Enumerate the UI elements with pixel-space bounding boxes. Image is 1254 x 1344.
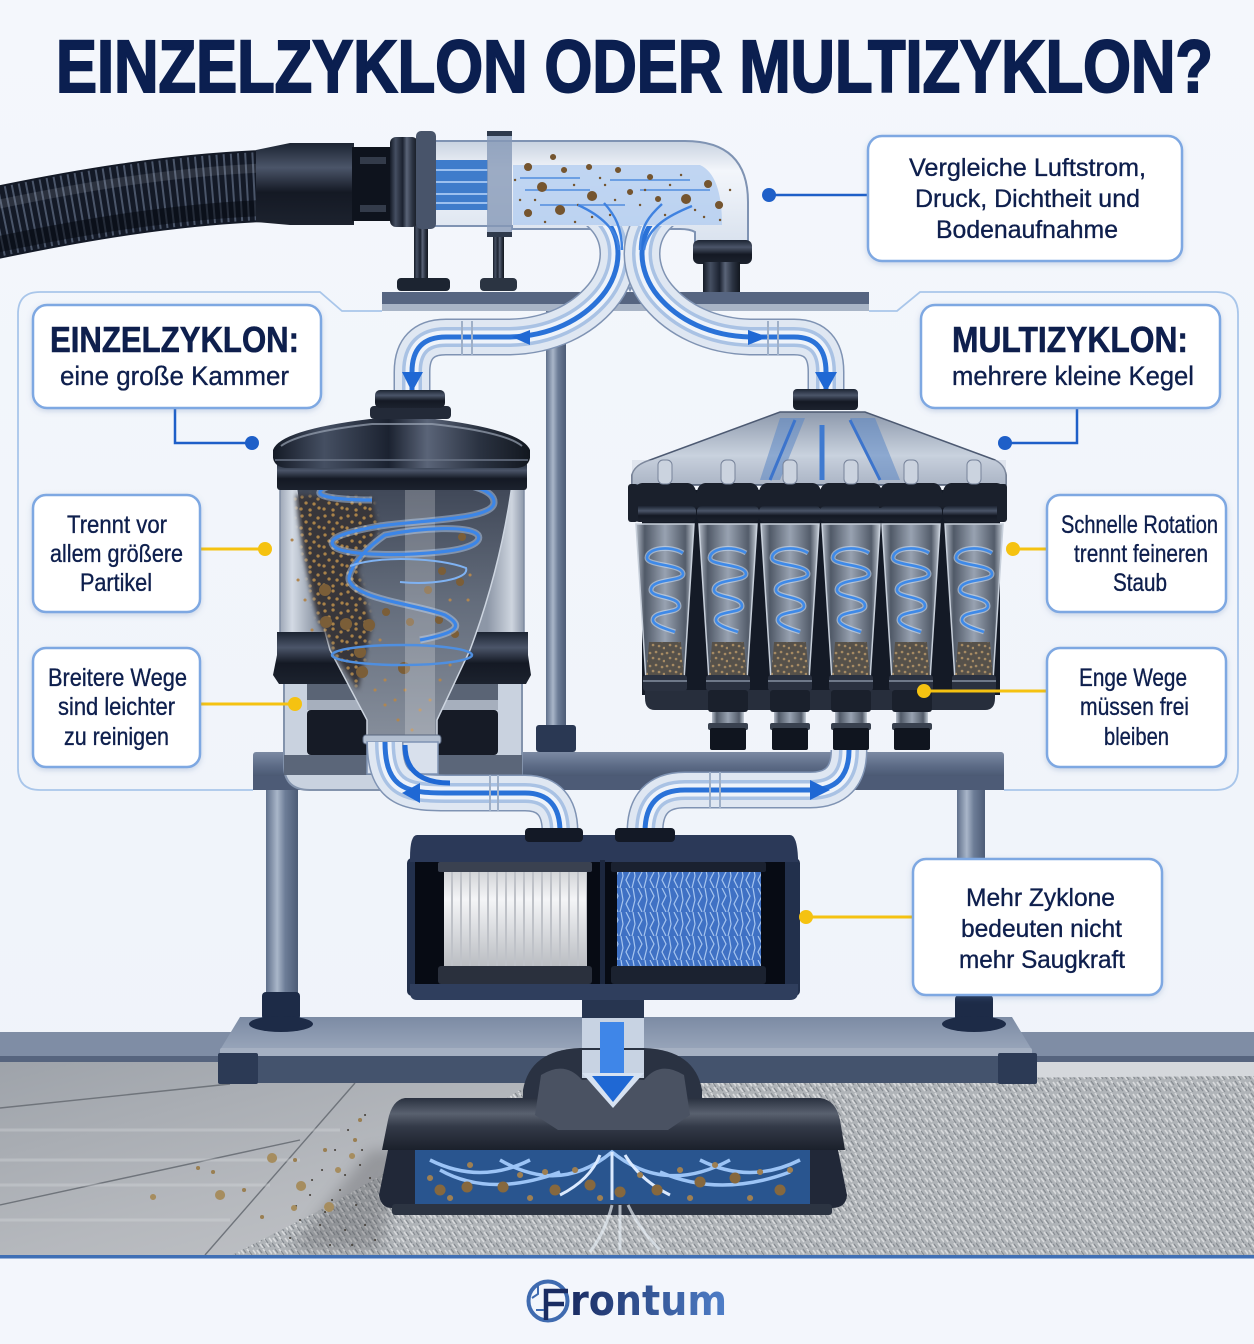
clear dome xyxy=(632,412,1006,485)
nozzle hub xyxy=(535,1069,690,1130)
callout: larger particles: allem größere xyxy=(50,540,183,568)
callout: narrow paths: müssen frei xyxy=(1080,693,1189,721)
callout: more cyclones: bedeuten nicht xyxy=(961,915,1122,943)
white pleated filter xyxy=(438,862,592,984)
panel outline: right xyxy=(869,292,1238,790)
airflow wisps xyxy=(590,1205,660,1252)
floor: carpet xyxy=(230,1076,1254,1256)
dark collar xyxy=(277,462,527,490)
swirl xyxy=(320,480,494,665)
filter inlets xyxy=(525,828,675,842)
dark backing xyxy=(642,490,1000,695)
callout: more cyclones: Mehr Zyklone xyxy=(966,884,1115,912)
heading box: Einzelzyklon: EINZELZYKLON: xyxy=(50,319,299,360)
base platform xyxy=(218,1017,1037,1084)
callout: larger particles: Partikel xyxy=(80,569,152,597)
callout: larger particles xyxy=(33,495,272,612)
left transfer pipe xyxy=(402,212,618,392)
dust inside cone xyxy=(285,485,470,730)
footer xyxy=(0,1255,1254,1344)
right transfer pipe xyxy=(642,212,837,392)
callout: fast rotation xyxy=(1006,495,1226,612)
callout: more cyclones xyxy=(799,859,1162,995)
heading box: Multizyklon: MULTIZYKLON: xyxy=(952,319,1188,360)
lower right pipe xyxy=(645,750,849,832)
flow arrow xyxy=(582,1045,644,1108)
filter unit xyxy=(407,828,800,1000)
callout: wider paths: sind leichter xyxy=(58,693,175,721)
stand legs xyxy=(249,790,1006,1032)
heading box: Einzelzyklon xyxy=(33,305,321,450)
top shelf with mounts xyxy=(382,225,869,311)
lid xyxy=(273,419,530,468)
clear cylinder xyxy=(280,475,524,640)
down stem xyxy=(582,1000,644,1084)
brush window xyxy=(412,1150,812,1206)
callout: airflow comparison xyxy=(762,136,1182,261)
cyclone cones xyxy=(628,460,1007,691)
light band xyxy=(405,425,435,735)
callout: narrow paths xyxy=(917,648,1226,767)
callout: narrow paths: bleiben xyxy=(1104,723,1169,751)
callout: wider paths: zu reinigen xyxy=(64,723,169,751)
callout: wider paths xyxy=(33,648,302,767)
lid neck xyxy=(370,390,451,419)
cone xyxy=(296,485,512,740)
pipe flanges xyxy=(390,131,512,237)
callout: fast rotation: Staub xyxy=(1113,569,1167,597)
multi neck xyxy=(793,389,858,410)
middle shelf xyxy=(253,752,1004,790)
nozzle arch xyxy=(523,1048,702,1125)
hose coupler xyxy=(256,143,394,225)
callout: fast rotation: Schnelle Rotation xyxy=(1061,511,1218,539)
callout: narrow paths: Enge Wege xyxy=(1079,664,1187,692)
internal dark block xyxy=(284,672,522,775)
airflow fan above pipes xyxy=(578,203,692,250)
callout: airflow comparison: Druck, Dichtheit und xyxy=(915,185,1140,213)
floor strip behind platform xyxy=(0,1032,1254,1084)
centre post xyxy=(536,310,576,752)
panel outline: left xyxy=(18,292,382,790)
hose xyxy=(0,168,262,246)
callout: more cyclones: mehr Saugkraft xyxy=(959,946,1125,974)
lower clear chamber xyxy=(284,682,522,790)
callout: larger particles: Trennt vor xyxy=(67,511,167,539)
floor: tiles xyxy=(0,1062,700,1256)
single cyclone xyxy=(273,390,531,790)
logo: Frontum xyxy=(528,1276,727,1325)
bottom tray xyxy=(645,690,995,710)
cyclone outlets xyxy=(708,690,932,750)
callout: wider paths: Breitere Wege xyxy=(48,664,187,692)
heading box: Einzelzyklon: eine große Kammer xyxy=(60,361,289,391)
callout: fast rotation: trennt feineren xyxy=(1074,540,1208,568)
callout: airflow comparison: Vergleiche Luftstrom, xyxy=(909,154,1146,182)
cleaner nozzle xyxy=(379,1045,847,1252)
nozzle upper body xyxy=(382,1098,845,1150)
pipe outlet cap xyxy=(693,240,752,292)
heading box: Multizyklon: mehrere kleine Kegel xyxy=(952,361,1194,391)
callout: airflow comparison: Bodenaufnahme xyxy=(936,216,1118,244)
dust on floor xyxy=(153,1115,400,1250)
logo wordmark: rontum xyxy=(570,1276,727,1325)
multi cyclone xyxy=(628,389,1007,750)
transparent inlet pipe with particles xyxy=(430,141,748,290)
neck collar xyxy=(363,735,441,744)
heading box: Multizyklon xyxy=(921,305,1220,450)
blue mesh filter xyxy=(611,862,766,984)
nozzle end caps and rim xyxy=(379,1150,847,1215)
lower left pipe xyxy=(367,742,560,832)
logo icon xyxy=(528,1282,568,1320)
lower black band xyxy=(273,632,531,684)
